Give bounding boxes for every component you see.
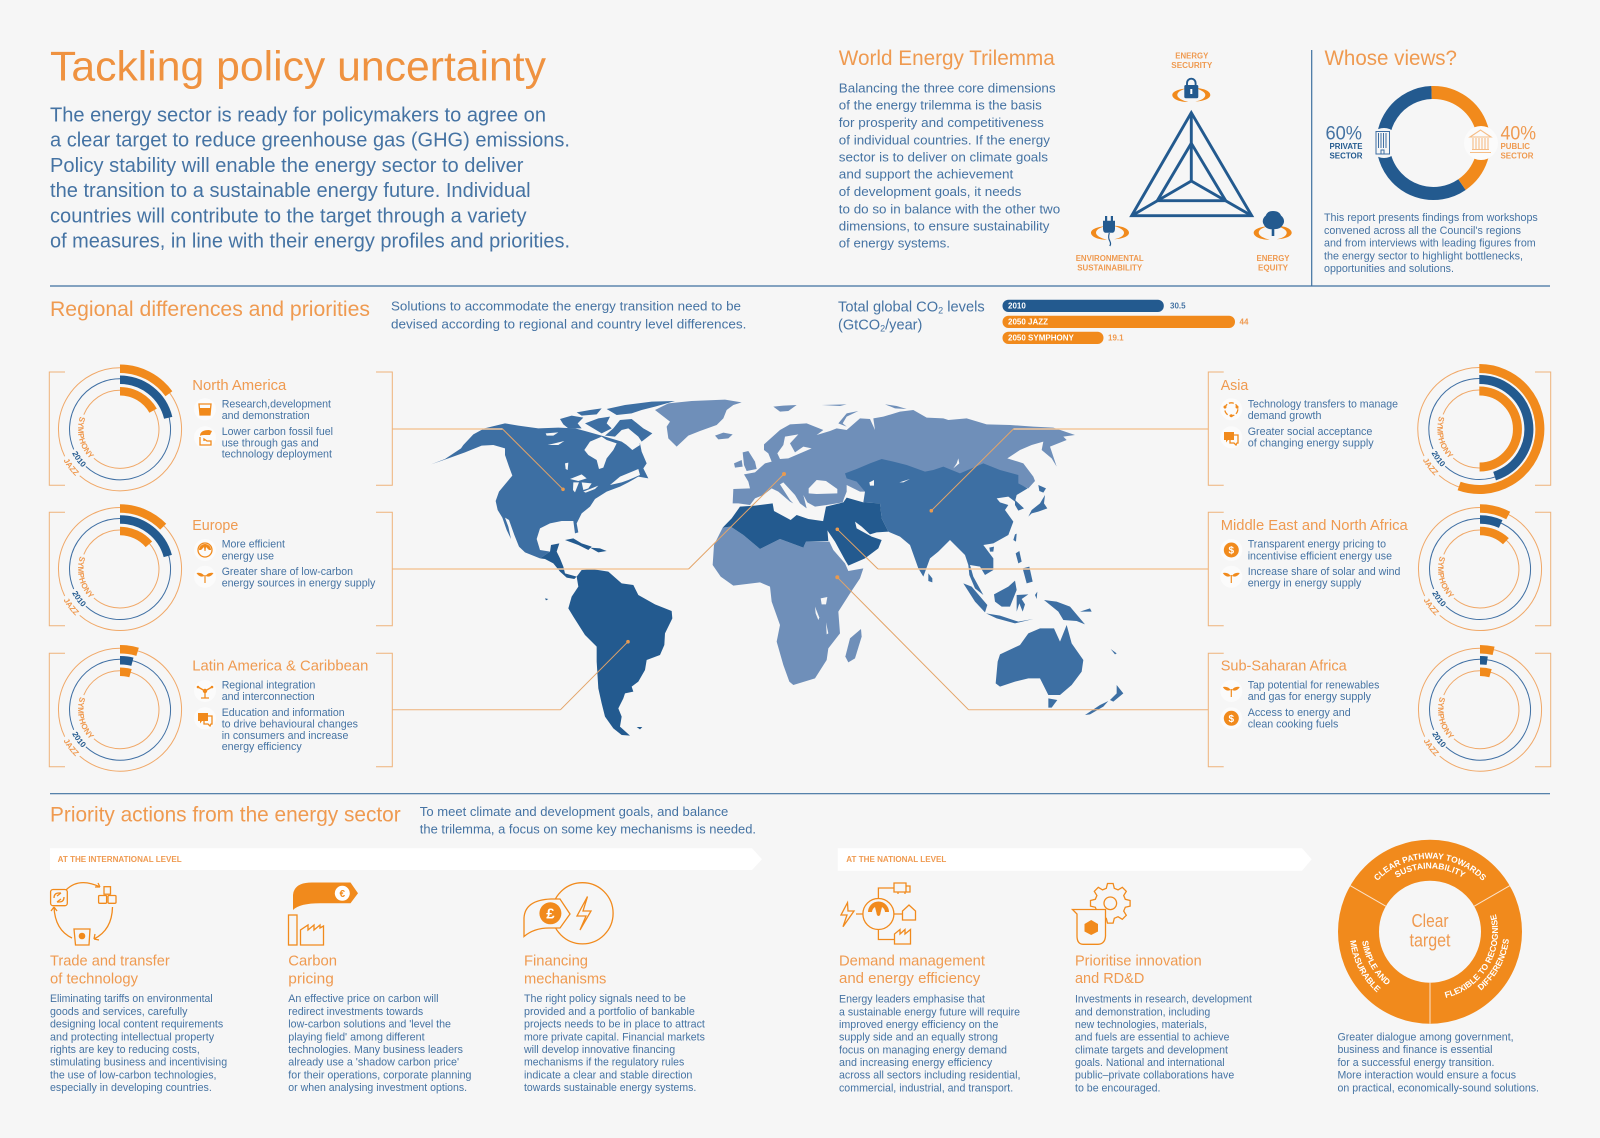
- body text: redirect investments towards: [288, 1006, 424, 1018]
- item text: Education and information: [222, 707, 345, 719]
- body text: projects needs to be in place to attract: [524, 1019, 705, 1031]
- heading: Asia: Asia: [1221, 377, 1249, 394]
- radial chart: Asia: JAZZ: [1423, 458, 1438, 476]
- bar: 2010: [1002, 300, 1186, 312]
- trilemma triangle diagram: [1132, 113, 1252, 216]
- icon: finance and energy: £: [546, 906, 555, 922]
- CO2 chart title: (GtCO: [838, 317, 880, 333]
- body text: climate targets and development: [1075, 1044, 1228, 1056]
- intro text block: Policy stability will enable the energy sector to deliver: [50, 155, 524, 177]
- trilemma body text: sector is to deliver on climate goals: [839, 150, 1048, 165]
- item text: use through gas and: [222, 437, 319, 449]
- panel: whose views: [1324, 47, 1538, 275]
- title: [839, 954, 985, 987]
- radial chart: Latin America: 2010: [72, 732, 86, 747]
- heading: trilemma: World Energy Trilemma: [839, 47, 1055, 70]
- radial chart: Sub-Saharan Africa: [1418, 645, 1542, 772]
- trilemma body text: of the energy trilemma is the basis: [839, 98, 1042, 113]
- icon: technology transfer cycle: [51, 883, 116, 945]
- radial chart: Asia: SYMPHONY: [1437, 416, 1454, 458]
- item text: technology deployment: [222, 449, 332, 461]
- centre label: [1410, 910, 1450, 951]
- CO2 chart title: [838, 300, 985, 333]
- body text: will develop innovative financing: [523, 1044, 675, 1056]
- map: Europe, Russia, Africa, Middle East and Asia: [713, 404, 1075, 685]
- bar: 2010: 2010: [1008, 302, 1026, 310]
- item text: [1248, 398, 1398, 449]
- bar: 2050 jazz: [1002, 316, 1249, 328]
- icon: cycle: [1220, 398, 1242, 420]
- body text: More interaction would ensure a focus: [1338, 1070, 1516, 1082]
- panel: North America: [48, 364, 393, 492]
- item text: Regional integration: [222, 680, 315, 692]
- item text: to drive behavioural changes: [222, 718, 358, 730]
- radial chart: Middle East and North Africa: JAZZ: [1424, 598, 1440, 616]
- bar: 2050 jazz: 2050 JAZZ: [1008, 318, 1048, 326]
- icon: dollar coin: [1220, 707, 1242, 729]
- body text: business and finance is essential: [1338, 1044, 1492, 1056]
- body text: commercial, industrial, and transport.: [839, 1083, 1013, 1095]
- CO2 chart title: /year): [885, 317, 922, 333]
- radial chart: Sub-Saharan Africa: 2010: [1432, 732, 1446, 747]
- body text: on practical, economically-sound solutions.: [1338, 1083, 1539, 1095]
- radial chart: Middle East and North Africa: SYMPHONY: [1438, 556, 1454, 598]
- item text: energy efficiency: [222, 741, 302, 753]
- heading: Sub-Saharan Africa: Sub-Saharan Africa: [1221, 658, 1347, 675]
- stat: 40 percent public sector: PUBLIC: [1500, 142, 1530, 151]
- icon: smart meter network: [841, 883, 916, 944]
- body text: Greater dialogue among government,: [1338, 1031, 1514, 1043]
- icon: carbon price factory: €: [340, 889, 346, 900]
- icon: finance and energy: [524, 883, 613, 944]
- icon: seedling: [1220, 566, 1242, 588]
- body text: technologies. Many business leaders: [288, 1044, 463, 1056]
- body text: designing local content requirements: [50, 1019, 224, 1031]
- item text: of changing energy supply: [1248, 437, 1374, 449]
- trilemma body text: Balancing the three core dimensions: [839, 80, 1056, 95]
- intro text block: [50, 105, 570, 252]
- icon: seedling: [1220, 680, 1242, 702]
- whose views body text: [1324, 212, 1538, 275]
- item text: Technology transfers to manage: [1248, 398, 1398, 410]
- item text: [1248, 680, 1380, 730]
- trilemma body text: [839, 80, 1060, 251]
- item text: Greater social acceptance: [1248, 426, 1372, 438]
- trilemma body text: to do so in balance with the other two: [839, 201, 1060, 216]
- body text: [288, 993, 472, 1094]
- body text: rights are key to reducing costs,: [50, 1044, 200, 1056]
- body text: The right policy signals need to be: [524, 993, 686, 1005]
- icon: dollar coin: $: [1229, 546, 1235, 556]
- panel: Middle East and North Africa: [1208, 504, 1552, 631]
- title: mechanisms: [524, 971, 606, 987]
- heading: Europe: Europe: [192, 517, 238, 534]
- CO2 chart title: 2: [938, 306, 943, 316]
- body text: supply side and an equally strong: [839, 1032, 998, 1044]
- radial chart: North America: SYMPHONY: [78, 416, 94, 458]
- icon: private sector tower: [1376, 132, 1390, 154]
- intro text block: The energy sector is ready for policymakers to agree on: [50, 105, 546, 127]
- icon: network: [194, 680, 216, 702]
- item text: Research,development: [222, 398, 331, 410]
- body text: [1075, 993, 1252, 1095]
- map: the Americas and Greenland: [431, 400, 742, 736]
- stat: 40 percent public sector: SECTOR: [1500, 152, 1534, 161]
- stat: 40 percent public sector: 40%: [1500, 123, 1536, 144]
- item text: Increase share of solar and wind: [1248, 566, 1400, 578]
- icon: dollar coin: $: [1229, 714, 1235, 725]
- body text: public–private collaborations have: [1075, 1070, 1234, 1082]
- intro text block: of measures, in line with their energy profiles and priorities.: [50, 230, 570, 252]
- item text: and interconnection: [222, 691, 315, 703]
- whose views body text: the energy sector to highlight bottlenecks,: [1324, 250, 1523, 262]
- banner: international level: AT THE INTERNATIONAL LEVEL: [58, 855, 182, 864]
- priority intro text: To meet climate and development goals, and balance: [420, 804, 728, 819]
- icon: speech bubbles: [1220, 426, 1242, 448]
- label: environmental sustainability: SUSTAINABILITY: [1077, 264, 1143, 273]
- item text: Transparent energy pricing to: [1248, 539, 1386, 551]
- banner: national level: [838, 848, 1312, 871]
- title: and energy efficiency: [839, 971, 981, 987]
- clear target donut diagram: SUSTAINABILITY: [1394, 862, 1466, 878]
- item text: Lower carbon fossil fuel: [222, 426, 333, 438]
- world map: [431, 400, 1123, 736]
- icon: tree on ring: [1254, 211, 1292, 240]
- leader lines connecting regions to map: [392, 429, 1208, 710]
- item text: clean cooking fuels: [1248, 718, 1339, 730]
- heading: regional differences: Regional differences and priorities: [50, 297, 370, 321]
- body text: new technologies, materials,: [1075, 1019, 1207, 1031]
- body text: and increasing energy efficiency: [839, 1057, 993, 1069]
- radial chart: Latin America: [58, 645, 182, 772]
- body text: focus on managing energy demand: [839, 1044, 1007, 1056]
- donut chart: 60 private 40 public: [1369, 92, 1498, 193]
- title: Tackling policy uncertainty: [50, 42, 546, 90]
- stat: 40 percent public sector: [1500, 123, 1536, 161]
- clear target donut diagram: [1338, 840, 1522, 1024]
- item text: [1248, 539, 1400, 590]
- radial chart: Europe: SYMPHONY: [78, 556, 94, 598]
- panel: clear target: [1338, 840, 1539, 1095]
- intro text block: the transition to a sustainable energy future. Individual: [50, 180, 531, 202]
- item text: [222, 680, 358, 753]
- icon: gauge: [194, 539, 216, 561]
- body text: and protecting intellectual property: [50, 1031, 215, 1043]
- item text: and gas for energy supply: [1248, 691, 1371, 703]
- body text: Investments in research, development: [1075, 993, 1252, 1005]
- radial chart: Asia: 2010: [1432, 451, 1445, 466]
- bar: 2050 symphony: 19.1: [1108, 334, 1124, 342]
- whose views body text: convened across all the Council's regions: [1324, 225, 1521, 237]
- radial chart: North America: [58, 364, 182, 492]
- item text: demand growth: [1248, 410, 1321, 422]
- stat: 60 percent private sector: [1326, 123, 1363, 161]
- title: Demand management: [839, 954, 985, 970]
- CO2 chart title: levels: [943, 300, 985, 316]
- body text: more private capital. Financial markets: [524, 1031, 705, 1043]
- regional intro text: Solutions to accommodate the energy transition need to be: [391, 299, 741, 314]
- body text: [839, 993, 1020, 1095]
- title: Carbon: [288, 954, 337, 970]
- item text: [222, 539, 376, 590]
- intro text block: countries will contribute to the target through a variety: [50, 205, 526, 227]
- heading: whose views: Whose views?: [1324, 47, 1457, 70]
- body text: [50, 993, 227, 1094]
- trilemma body text: of energy systems.: [839, 236, 950, 251]
- clear target donut diagram: SIMPLE AND: [1362, 940, 1390, 984]
- item text: energy in energy supply: [1248, 578, 1362, 590]
- label: energy equity: [1256, 254, 1290, 273]
- icon: fossil fuel plant: [194, 426, 216, 448]
- body text: [523, 993, 705, 1094]
- item text: incentivise efficient energy use: [1248, 550, 1392, 562]
- label: energy security: SECURITY: [1171, 61, 1213, 70]
- item text: and demonstration: [222, 410, 310, 422]
- body text: stimulating business and incentivising: [50, 1057, 227, 1069]
- whose views body text: This report presents findings from workshops: [1324, 212, 1538, 224]
- clear target donut diagram: MEASURABLE: [1350, 940, 1381, 992]
- panel: total global CO2 levels: [838, 300, 1249, 344]
- bar: 2010: 30.5: [1170, 302, 1186, 310]
- radial chart: Middle East and North Africa: [1418, 504, 1542, 631]
- radial chart: Europe: 2010: [72, 591, 86, 606]
- label: energy equity: ENERGY: [1256, 254, 1290, 263]
- radial chart: Latin America: JAZZ: [64, 739, 80, 756]
- regional intro text: devised according to regional and country level differences.: [391, 316, 746, 331]
- body text: [1338, 1031, 1539, 1095]
- icon: speech bubbles: [194, 707, 216, 729]
- icon: beaker: [194, 398, 216, 420]
- banner: international level: [50, 848, 762, 870]
- item text: energy use: [222, 550, 274, 562]
- body text: for their operations, corporate planning: [288, 1069, 472, 1081]
- body text: the use of low-carbon technologies,: [50, 1069, 216, 1081]
- title: [288, 954, 337, 987]
- radial chart: Asia: [1417, 364, 1544, 494]
- panel: prioritise innovation: [1072, 884, 1252, 1095]
- item text: in consumers and increase: [222, 730, 348, 742]
- clear target donut diagram: FLEXIBLE TO RECOGNISE: [1444, 914, 1498, 998]
- label: energy equity: EQUITY: [1258, 264, 1289, 273]
- title: [1075, 954, 1202, 987]
- body text: provided and a portfolio of bankable: [524, 1006, 695, 1018]
- body text: and demonstration, including: [1075, 1006, 1210, 1018]
- panel: world energy trilemma: [839, 47, 1292, 273]
- body text: for a successful energy transition.: [1338, 1057, 1494, 1069]
- body text: across all sectors including residential,: [839, 1070, 1020, 1082]
- trilemma body text: of individual countries. If the energy: [839, 132, 1050, 147]
- clear target donut diagram: DIFFERENCES: [1477, 938, 1509, 990]
- intro text block: a clear target to reduce greenhouse gas (GHG) emissions.: [50, 130, 570, 152]
- panel: carbon pricing: [288, 882, 472, 1094]
- CO2 chart title: Total global CO: [838, 300, 937, 316]
- icon: public sector building: [1470, 130, 1491, 152]
- item text: [222, 398, 333, 461]
- label: energy security: [1171, 51, 1213, 70]
- body text: goals. National and international: [1075, 1057, 1225, 1069]
- body text: indicate a clear and stable direction: [524, 1069, 692, 1081]
- item text: Tap potential for renewables: [1248, 680, 1380, 692]
- body text: to be encouraged.: [1075, 1083, 1160, 1095]
- heading: North America: North America: [192, 377, 287, 394]
- body text: Eliminating tariffs on environmental: [50, 993, 213, 1005]
- banner: national level: AT THE NATIONAL LEVEL: [846, 855, 946, 864]
- whose views body text: and from interviews with leading figures from: [1324, 238, 1536, 250]
- trilemma body text: and support the achievement: [839, 167, 1014, 182]
- body text: playing field' among different: [288, 1031, 425, 1043]
- bar: 2050 symphony: 2050 SYMPHONY: [1008, 334, 1074, 342]
- body text: improved energy efficiency on the: [839, 1019, 998, 1031]
- trilemma body text: for prosperity and competitiveness: [839, 115, 1044, 130]
- body text: and fuels are essential to achieve: [1075, 1032, 1229, 1044]
- trilemma body text: of development goals, it needs: [839, 184, 1022, 199]
- icon: gear and beaker: [1072, 884, 1130, 944]
- item text: energy sources in energy supply: [222, 578, 376, 590]
- body text: goods and services, carefully: [50, 1006, 188, 1018]
- CO2 chart title: 2: [880, 323, 885, 333]
- stat: 60 percent private sector: PRIVATE: [1330, 142, 1363, 151]
- title: [524, 954, 606, 987]
- icon: carbon price factory: [288, 882, 358, 945]
- icon: padlock on ring: [1172, 79, 1210, 102]
- panel: Asia: [1208, 364, 1552, 494]
- radial chart: Sub-Saharan Africa: SYMPHONY: [1438, 697, 1454, 738]
- label: environmental sustainability: ENVIRONMENTAL: [1076, 254, 1144, 263]
- body text: An effective price on carbon will: [288, 993, 438, 1005]
- radial chart: North America: JAZZ: [64, 458, 80, 476]
- heading: Middle East and North Africa: Middle East and North Africa: [1221, 517, 1408, 534]
- panel: demand management: [839, 883, 1020, 1095]
- radial chart: Sub-Saharan Africa: JAZZ: [1424, 739, 1440, 756]
- regional intro text: [391, 299, 746, 331]
- body text: already use a 'shadow carbon price': [288, 1057, 459, 1069]
- title: Trade and transfer: [50, 954, 170, 970]
- radial chart: Europe: [58, 504, 182, 631]
- title: [50, 954, 170, 987]
- label: energy security: ENERGY: [1175, 51, 1209, 60]
- trilemma body text: dimensions, to ensure sustainability: [839, 218, 1050, 233]
- item text: Greater share of low-carbon: [222, 566, 353, 578]
- centre label: target: [1410, 930, 1450, 951]
- priority intro text: [420, 804, 756, 836]
- map: South-East Asia and Oceania: [928, 485, 1123, 715]
- panel: financing mechanisms: [523, 883, 705, 1094]
- body text: mechanisms if the regulatory rules: [524, 1057, 685, 1069]
- body text: Energy leaders emphasise that: [839, 993, 985, 1005]
- title: of technology: [50, 971, 139, 987]
- bar: 2050 jazz: 44: [1240, 318, 1249, 326]
- item text: More efficient: [222, 539, 285, 551]
- panel: Sub-Saharan Africa: [1208, 645, 1552, 772]
- body text: a sustainable energy future will require: [839, 1006, 1020, 1018]
- radial chart: Middle East and North Africa: 2010: [1432, 591, 1446, 606]
- radial chart: Europe: JAZZ: [64, 598, 80, 616]
- heading: priority actions: Priority actions from the energy sector: [50, 803, 401, 827]
- clear target donut diagram: CLEAR PATHWAY TOWARDS: [1374, 852, 1486, 880]
- body text: especially in developing countries.: [50, 1082, 212, 1094]
- body text: low-carbon solutions and 'level the: [288, 1019, 451, 1031]
- body text: towards sustainable energy systems.: [524, 1082, 696, 1094]
- whose views body text: opportunities and solutions.: [1324, 263, 1454, 275]
- priority intro text: the trilemma, a focus on some key mechanisms is needed.: [420, 821, 756, 836]
- centre label: Clear: [1412, 910, 1448, 931]
- item text: Access to energy and: [1248, 707, 1351, 719]
- panel: trade and transfer of technology: [50, 883, 227, 1094]
- title: Financing: [524, 954, 588, 970]
- icon: seedling: [194, 566, 216, 588]
- icon: dollar coin: [1220, 539, 1242, 561]
- panel: Latin America and Caribbean: [48, 645, 393, 772]
- title: and RD&D: [1075, 971, 1144, 987]
- stat: 60 percent private sector: 60%: [1326, 123, 1362, 144]
- label: environmental sustainability: [1076, 254, 1144, 273]
- heading: Latin America: Latin America & Caribbean: [192, 658, 368, 675]
- panel: Europe: [48, 504, 393, 631]
- title: pricing: [288, 971, 334, 987]
- title: Prioritise innovation: [1075, 954, 1202, 970]
- icon: plug on ring: [1091, 216, 1129, 246]
- bar: 2050 symphony: [1002, 332, 1124, 344]
- radial chart: North America: 2010: [72, 451, 86, 467]
- radial chart: Latin America: SYMPHONY: [78, 697, 94, 738]
- stat: 60 percent private sector: SECTOR: [1330, 152, 1363, 161]
- body text: or when analysing investment options.: [288, 1082, 467, 1094]
